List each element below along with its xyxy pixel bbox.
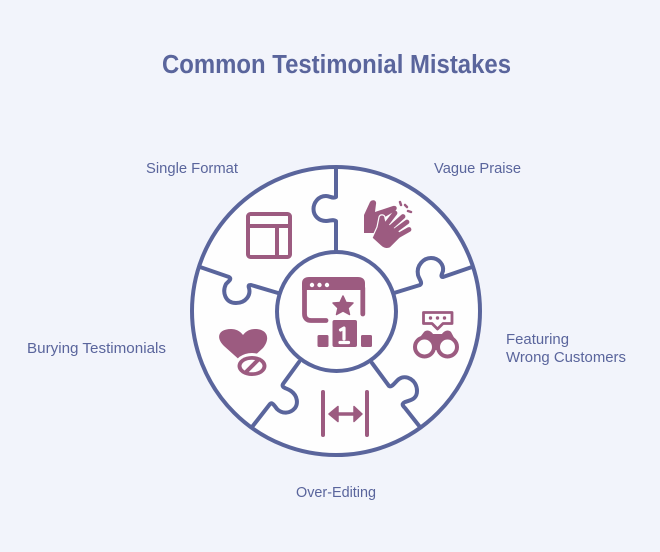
puzzle wheel — [192, 167, 480, 455]
label: Featuring Wrong Customers: Featuring — [506, 332, 569, 348]
icon: heart with pill — [219, 329, 270, 379]
icon: browser window with star and podium — [302, 277, 372, 347]
label: Featuring Wrong Customers — [506, 332, 626, 366]
icon: width arrows — [323, 392, 367, 435]
center circle — [277, 252, 396, 371]
connector: top — [314, 167, 336, 252]
label: Vague Praise: Vague Praise — [434, 161, 521, 177]
icon: layout table — [248, 214, 290, 257]
label: Single Format: Single Format — [146, 161, 238, 177]
title: Common Testimonial Mistakes — [162, 51, 511, 79]
outer ring — [192, 167, 480, 455]
label: Featuring Wrong Customers: Wrong Customers — [506, 350, 626, 366]
icon: clapping hands — [364, 200, 411, 249]
label: Over-Editing: Over-Editing — [296, 485, 376, 501]
icon: binoculars with speech bubble — [414, 312, 458, 356]
connector: lower right — [372, 363, 420, 427]
connector: lower left — [252, 362, 299, 427]
label: Burying Testimonials: Burying Testimonials — [27, 341, 166, 357]
connector: upper right — [394, 258, 472, 293]
connector: upper left — [200, 267, 278, 303]
